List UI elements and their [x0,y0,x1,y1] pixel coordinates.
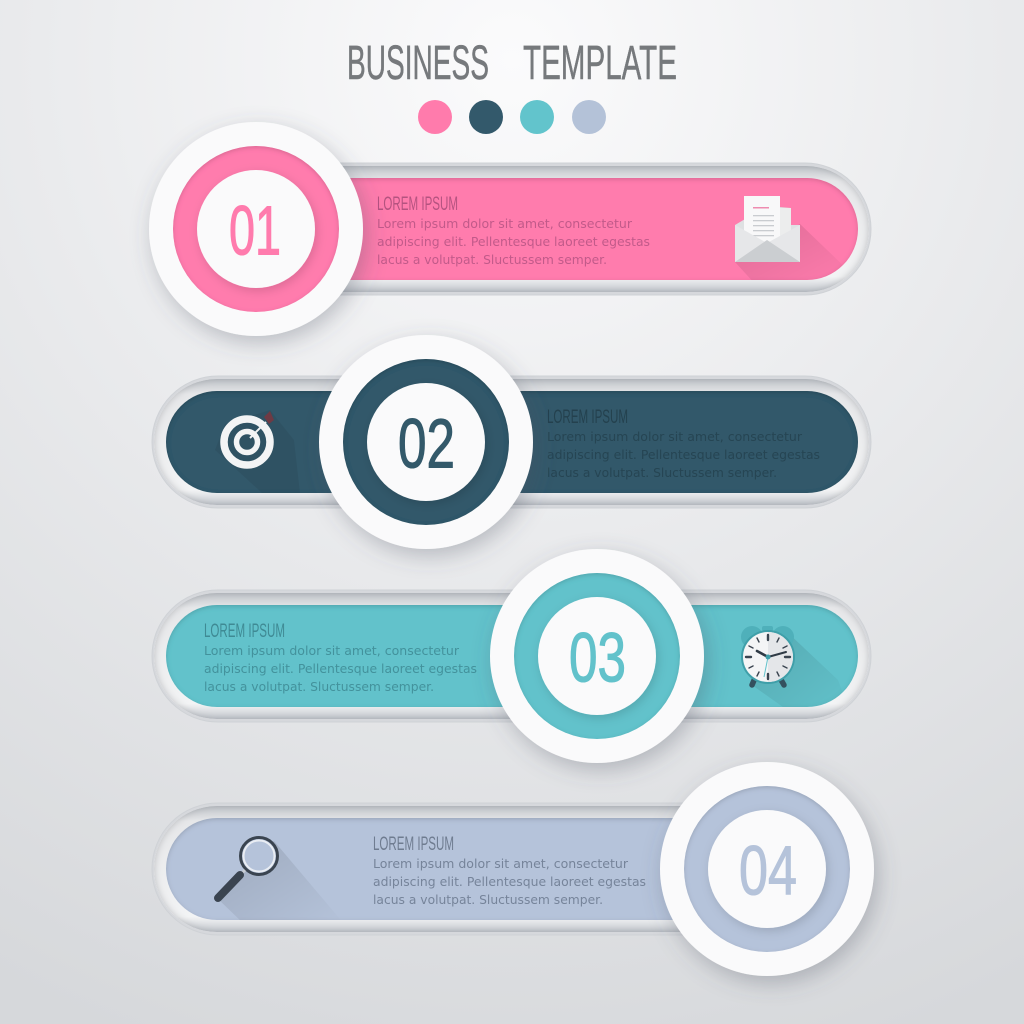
text block 01 [377,194,650,267]
bar 04 [152,803,871,935]
panel: step 02 [152,335,871,549]
text block 03: adipiscing elit. Pellentesque laoreet egestas [204,661,477,676]
number badge 03 [490,549,704,763]
text block 04: lacus a volutpat. Sluctussem semper. [373,892,603,907]
colour palette dots [418,100,606,134]
text block 02: lacus a volutpat. Sluctussem semper. [547,465,777,480]
text block 01: Lorem ipsum dolor sit amet, consectetur [377,216,633,231]
text block 04: adipiscing elit. Pellentesque laoreet egestas [373,874,646,889]
number badge 02 [319,335,533,549]
panel: step 01 [149,122,871,336]
text block 04: LOREM IPSUM [373,834,454,855]
bar 02 [152,376,871,508]
number badge 03: 03 [569,618,626,696]
text block 01: adipiscing elit. Pellentesque laoreet egestas [377,234,650,249]
title: TEMPLATE [523,37,677,90]
number badge 04: 04 [739,832,797,910]
number badge 01 [149,122,363,336]
text block 02: Lorem ipsum dolor sit amet, consectetur [547,429,803,444]
text block 04 [373,834,646,907]
number badge 02: 02 [398,404,455,482]
icon: target with arrow [220,411,274,469]
text block 01: LOREM IPSUM [377,194,458,215]
bar 01 [152,163,871,295]
number badge 04 [660,762,874,976]
text block 03: Lorem ipsum dolor sit amet, consectetur [204,643,460,658]
text block 02 [547,407,820,480]
bar 03 [152,590,871,722]
text block 02: LOREM IPSUM [547,407,628,428]
title: BUSINESS [347,37,489,90]
text block 01: lacus a volutpat. Sluctussem semper. [377,252,607,267]
text block 03: lacus a volutpat. Sluctussem semper. [204,679,434,694]
text block 02: adipiscing elit. Pellentesque laoreet egestas [547,447,820,462]
text block 04: Lorem ipsum dolor sit amet, consectetur [373,856,629,871]
icon: alarm clock [741,626,832,707]
text block 03: LOREM IPSUM [204,621,285,642]
icon: magnifying glass [214,836,317,920]
text block 03 [204,621,477,694]
panel: step 03 [152,549,871,763]
panel: step 04 [152,762,874,976]
icon: open envelope with letter [735,196,838,280]
number badge 01: 01 [229,192,281,270]
